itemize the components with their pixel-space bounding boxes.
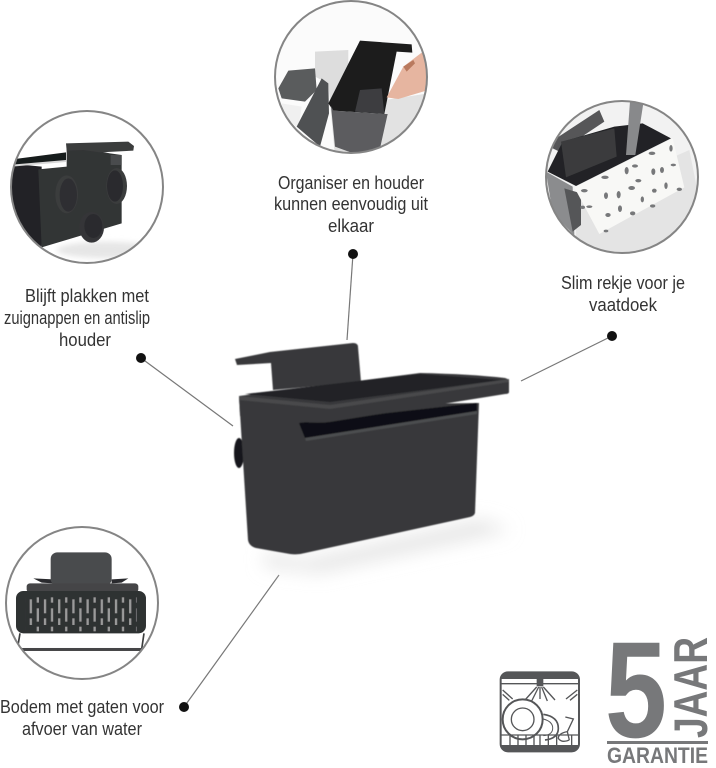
label: suction cups: [4, 286, 150, 350]
label: drainage base: afvoer van water: [22, 719, 142, 739]
label: dishcloth rack: [561, 273, 685, 315]
label: organiser and holder separate: kunnen eenvoudig uit: [274, 194, 428, 214]
label: dishcloth rack: vaatdoek: [589, 295, 658, 315]
pointer: base: [179, 575, 279, 712]
label: suction cups: houder: [59, 330, 111, 350]
label: dishcloth rack: Slim rekje voor je: [561, 273, 685, 293]
circle photo: perforated base: [5, 526, 159, 680]
circle photo: suction cups: [10, 110, 164, 264]
label: organiser and holder separate: Organiser en houder: [278, 173, 424, 193]
label: suction cups: Blijft plakken met: [25, 286, 149, 306]
label: organiser and holder separate: [274, 173, 428, 236]
circle photo: lifting organiser out of holder: [274, 0, 428, 154]
pointer: dishcloth rack: [521, 331, 617, 381]
product: sink organiser: [234, 343, 510, 572]
label: drainage base: Bodem met gaten voor: [0, 697, 164, 717]
warranty badge: 5 jaar garantie: JAAR: [664, 637, 716, 738]
label: organiser and holder separate: elkaar: [328, 216, 374, 236]
pointer: suction cups: [136, 353, 233, 426]
circle photo: dishcloth rack: [545, 100, 699, 254]
pointer: organiser: [347, 249, 358, 340]
label: suction cups: zuignappen en antislip: [4, 308, 150, 328]
icon: dishwasher safe: [501, 672, 579, 751]
warranty badge: 5 jaar garantie: 5: [605, 614, 667, 767]
label: drainage base: [0, 697, 164, 739]
warranty badge: 5 jaar garantie: [605, 614, 716, 768]
